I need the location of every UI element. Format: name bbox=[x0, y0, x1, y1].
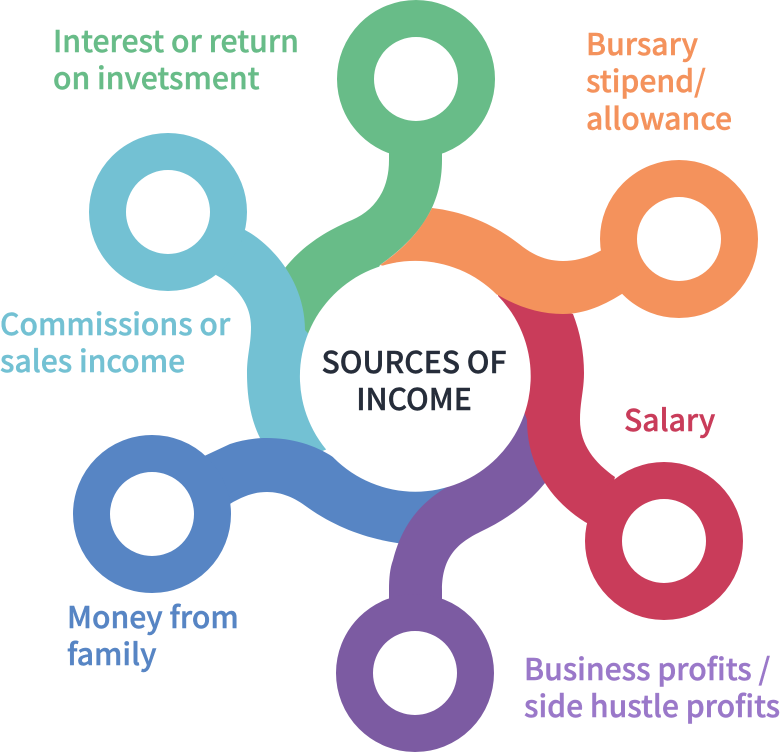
arm and ring: business profits bbox=[354, 410, 545, 734]
label: salary: Salary bbox=[624, 396, 715, 440]
center circle bbox=[300, 261, 531, 492]
label: interest or return on investment: Interest or return bbox=[53, 17, 299, 61]
label: interest or return on investment: on invetsment bbox=[53, 54, 260, 98]
arm and ring: commissions or sales income bbox=[108, 152, 350, 460]
label: bursary stipend allowance: stipend/ bbox=[586, 57, 706, 101]
arm and ring: interest or return bbox=[285, 18, 476, 340]
arm and ring: bursary stipend allowance bbox=[380, 178, 740, 314]
label: bursary stipend allowance: Bursary bbox=[586, 20, 698, 64]
label: business profits side hustle profits: side hustle profits bbox=[524, 682, 780, 726]
label: business profits side hustle profits: Business profits / bbox=[524, 645, 770, 689]
label: money from family: Money from bbox=[67, 593, 239, 637]
label: money from family: family bbox=[67, 630, 156, 674]
arm and ring: salary bbox=[498, 295, 724, 602]
label: bursary stipend allowance: allowance bbox=[586, 94, 732, 138]
title: INCOME bbox=[356, 375, 472, 419]
arm and ring: money from family bbox=[92, 438, 447, 574]
label: commissions or sales income: sales income bbox=[0, 337, 185, 381]
label: commissions or sales income: Commissions or bbox=[0, 300, 230, 344]
title: SOURCES OF bbox=[321, 338, 507, 382]
